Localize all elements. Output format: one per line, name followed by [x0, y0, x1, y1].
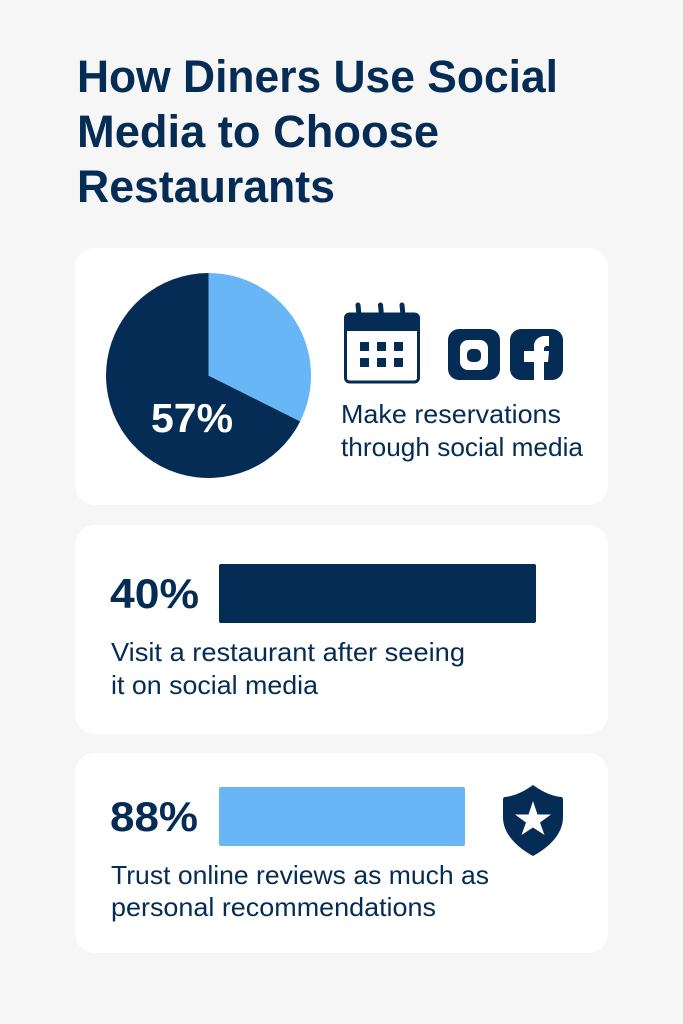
stat: 40%: 40% — [110, 570, 199, 617]
text: visits description — [111, 637, 465, 700]
text: visits description: it on social media — [111, 670, 319, 700]
stat: 88%: 88% — [110, 793, 198, 840]
title: Restaurants — [77, 161, 335, 212]
text: trust description: personal recommendations — [111, 892, 436, 922]
text: reservations description: through social media — [341, 432, 584, 462]
icon: calendar — [344, 305, 420, 382]
title: How Diners Use Social — [77, 51, 558, 102]
panel: reservations — [75, 248, 608, 505]
bar: 40% — [219, 564, 536, 623]
text: visits description: Visit a restaurant after seeing — [111, 637, 465, 667]
panel: trust — [75, 753, 608, 953]
text: reservations description — [341, 399, 584, 462]
title — [77, 51, 558, 212]
icon: instagram — [448, 329, 500, 380]
title: Media to Choose — [77, 106, 439, 157]
pie chart: 57%: 57% — [151, 395, 233, 441]
text: trust description — [111, 860, 489, 922]
icon: facebook — [510, 329, 563, 380]
panel: visits — [75, 525, 608, 734]
text: reservations description: Make reservations — [341, 399, 561, 429]
bar: 88% — [219, 787, 465, 846]
icon: shield with star — [503, 785, 563, 856]
text: trust description: Trust online reviews as much as — [111, 860, 489, 890]
pie chart: 57% — [106, 273, 311, 478]
